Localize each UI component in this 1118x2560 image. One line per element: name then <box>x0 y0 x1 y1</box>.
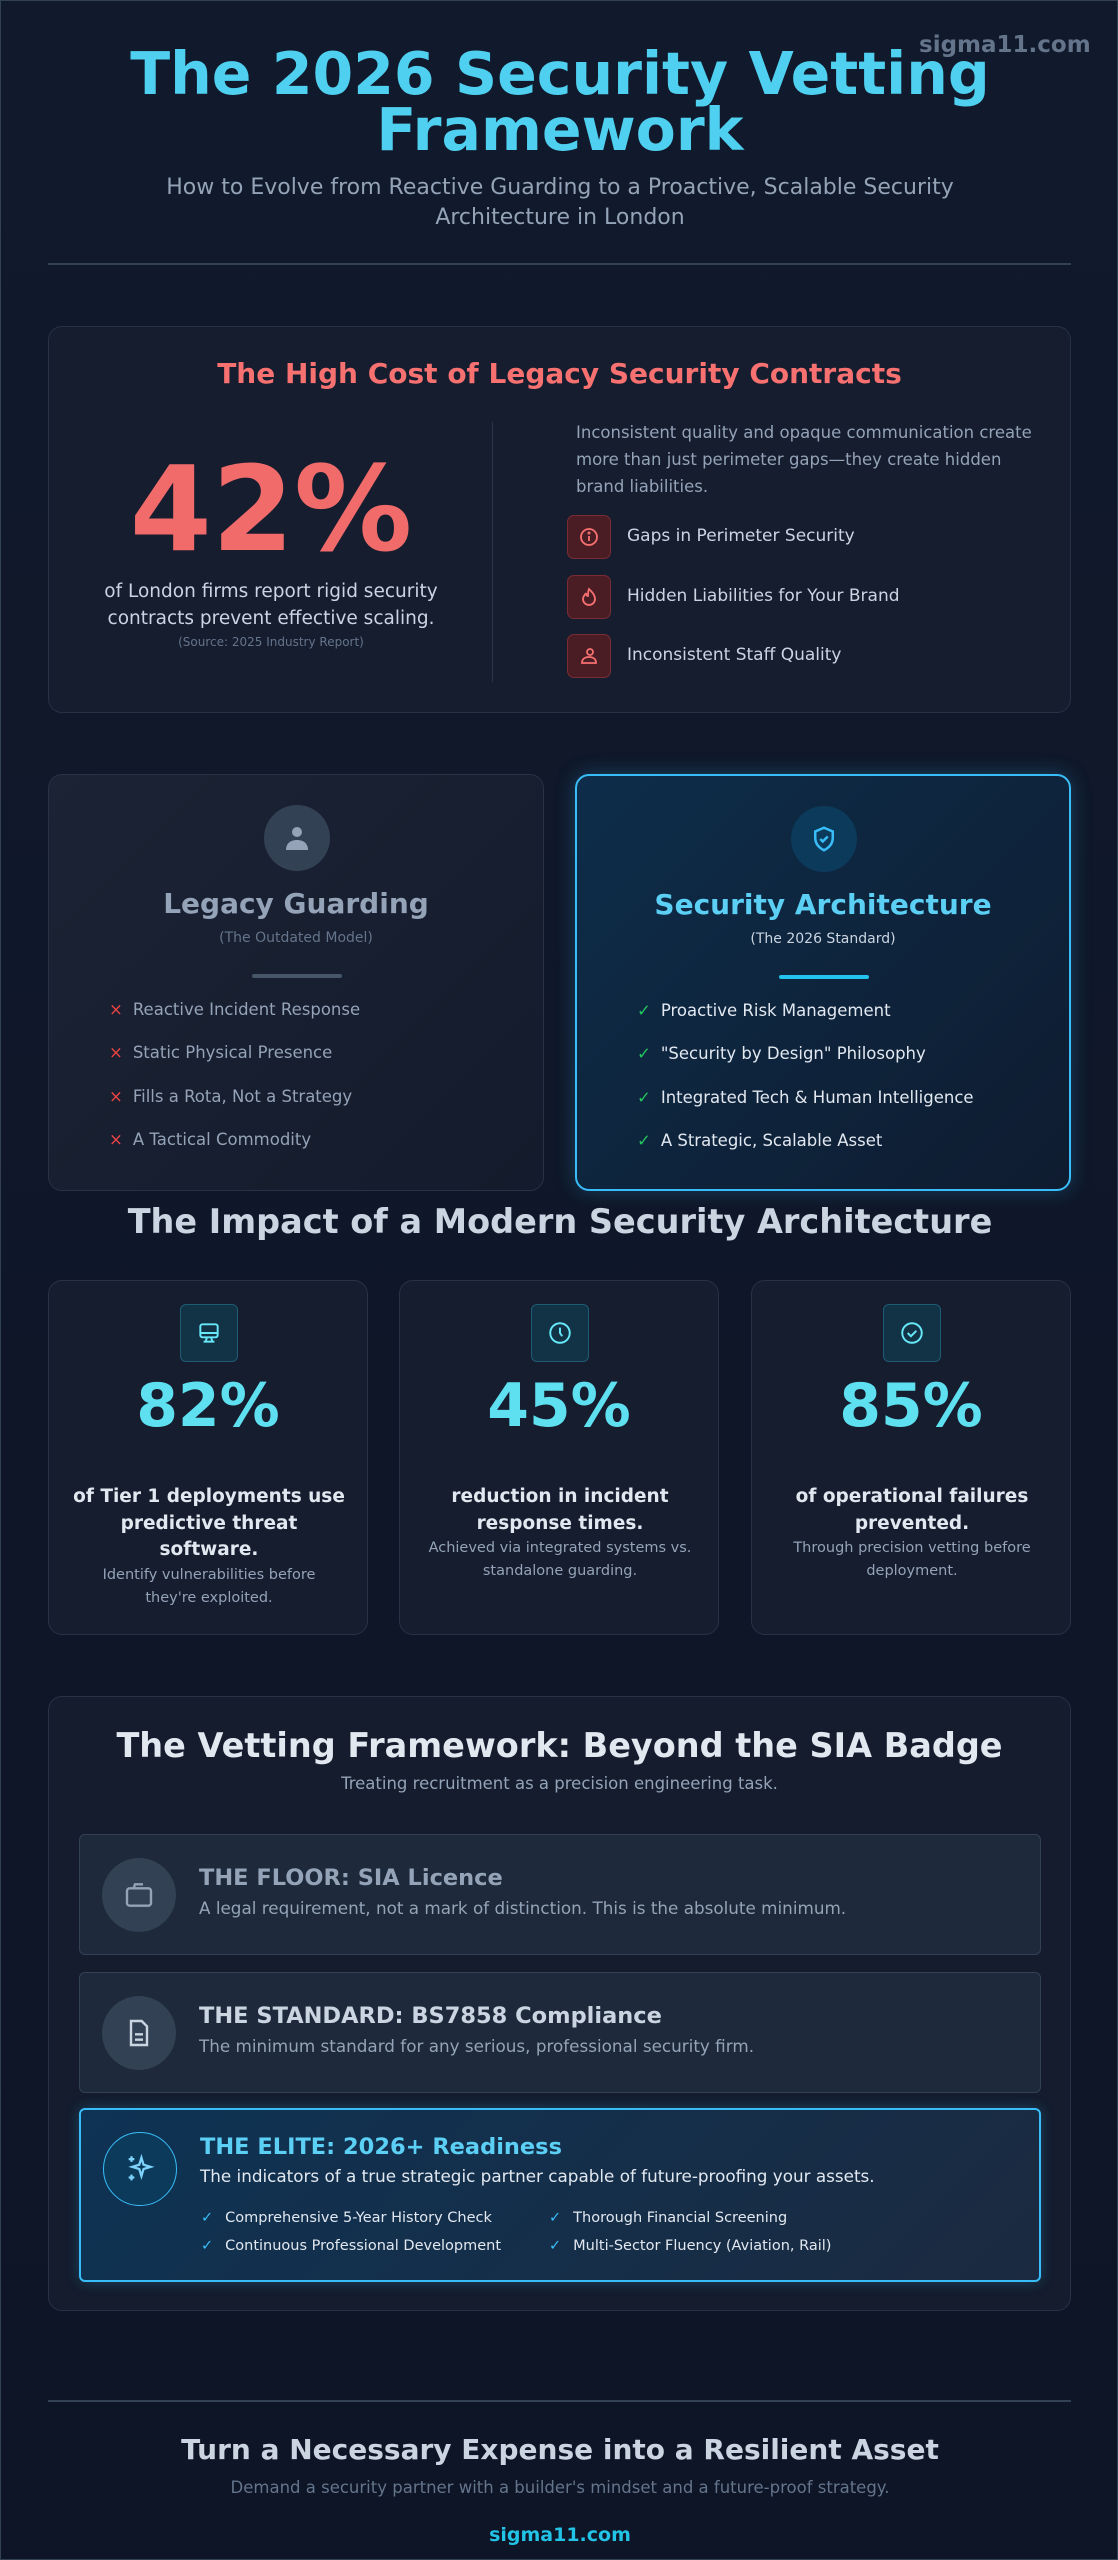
panel heading: The High Cost of Legacy Security Contracts <box>217 357 902 390</box>
icon: clock <box>531 1304 589 1362</box>
stat card: 82%: of Tier 1 deployments use <box>73 1486 345 1507</box>
subtitle: How to Evolve from Reactive Guarding to a Proactive, Scalable Security <box>166 175 954 200</box>
tier: elite <box>79 2108 1041 2282</box>
liabilities text: more than just perimeter gaps—they create hidden <box>576 450 1001 469</box>
icon: flame <box>567 575 611 619</box>
stat card: 45%: standalone guarding. <box>483 1563 637 1579</box>
card title: Legacy Guarding <box>163 887 429 920</box>
list: legacy traits <box>109 1000 360 1149</box>
checklist <box>201 2210 831 2254</box>
stat card: 85%: prevented. <box>855 1512 969 1534</box>
icon: person <box>264 805 330 871</box>
tier: standard: The minimum standard for any serious, professional security firm. <box>199 2036 754 2056</box>
panel: security architecture <box>575 774 1071 1191</box>
panel: high cost of legacy contracts <box>48 326 1071 713</box>
stat card: 85%: of operational failures <box>796 1486 1028 1507</box>
panel: security architecture: (The 2026 Standard) <box>750 931 896 947</box>
icon list: risks: Gaps in Perimeter Security <box>627 526 855 546</box>
brand watermark: sigma11.com <box>919 32 1091 58</box>
stat card: 82%: they're exploited. <box>145 1590 273 1606</box>
tier: standard: THE STANDARD: BS7858 Compliance <box>199 2003 662 2029</box>
icon: shield <box>791 806 857 872</box>
source note: (Source: 2025 Industry Report) <box>178 635 364 649</box>
stat card: 85% <box>751 1280 1071 1635</box>
icon: monitor <box>180 1304 238 1362</box>
list: architecture traits: ✓ "Security by Design" Philosophy <box>637 1044 926 1063</box>
checklist: ✓ Comprehensive 5-Year History Check <box>201 2210 492 2226</box>
list: architecture traits: ✓ A Strategic, Scalable Asset <box>637 1131 882 1150</box>
stat card: 82%: software. <box>160 1539 258 1560</box>
stat caption: contracts prevent effective scaling. <box>108 608 434 629</box>
icon list: risks: Inconsistent Staff Quality <box>627 645 841 665</box>
list: legacy traits: × Static Physical Presence <box>109 1043 332 1062</box>
checklist: ✓ Multi-Sector Fluency (Aviation, Rail) <box>549 2238 831 2254</box>
stat card: 45% <box>399 1280 719 1635</box>
panel: vetting framework: Treating recruitment as a precision engineering task. <box>341 1774 778 1793</box>
liabilities text: brand liabilities. <box>576 477 708 496</box>
stat card: 45%: Achieved via integrated systems vs. <box>429 1540 691 1556</box>
title: The 2026 Security Vetting <box>130 40 990 108</box>
icon list: risks: Hidden Liabilities for Your Brand <box>627 586 900 606</box>
subtitle: Architecture in London <box>435 205 685 230</box>
stat card: 45%: response times. <box>477 1512 643 1534</box>
list: architecture traits <box>637 1001 974 1150</box>
tier: floor: THE FLOOR: SIA Licence <box>199 1865 503 1891</box>
tier: elite: THE ELITE: 2026+ Readiness <box>200 2134 562 2160</box>
stat card: 85%: Through precision vetting before <box>793 1540 1031 1556</box>
icon: document <box>102 1996 176 2070</box>
CTA subtext: Demand a security partner with a builder's mindset and a future-proof strategy. <box>231 2478 889 2497</box>
stat card: 45%: 45% <box>487 1371 631 1441</box>
tier: standard <box>79 1972 1041 2093</box>
stat card: 85%: deployment. <box>866 1563 958 1579</box>
footer link: sigma11.com <box>489 2524 631 2546</box>
panel: vetting framework <box>48 1696 1071 2311</box>
icon list: risks <box>567 515 900 678</box>
checklist: ✓ Thorough Financial Screening <box>549 2210 787 2226</box>
stat card: 45%: reduction in incident <box>451 1486 669 1507</box>
panel heading: The Vetting Framework: Beyond the SIA Badge <box>116 1726 1003 1765</box>
list: legacy traits: × Reactive Incident Response <box>109 1000 360 1019</box>
checklist: ✓ Continuous Professional Development <box>201 2238 501 2254</box>
icon: info <box>567 515 611 559</box>
tier: elite: The indicators of a true strategic partner capable of future-proofing your assets. <box>200 2166 875 2186</box>
liabilities text: Inconsistent quality and opaque communication create <box>576 423 1032 442</box>
subtitle <box>166 175 954 230</box>
liabilities text <box>576 423 1032 496</box>
tier: floor: A legal requirement, not a mark of distinction. This is the absolute minimum. <box>199 1898 846 1918</box>
list: architecture traits: ✓ Proactive Risk Management <box>637 1001 891 1020</box>
title: Framework <box>376 96 744 164</box>
stat card: 82%: Identify vulnerabilities before <box>103 1566 315 1582</box>
stat card: 85%: 85% <box>839 1371 983 1441</box>
tier: floor <box>79 1834 1041 1955</box>
stat caption <box>104 581 438 629</box>
big stat 42%: 42% <box>130 440 412 578</box>
list: architecture traits: ✓ Integrated Tech & Human Intelligence <box>637 1088 974 1107</box>
stat card: 82%: 82% <box>136 1371 280 1441</box>
card title: Security Architecture <box>654 888 992 921</box>
CTA heading: Turn a Necessary Expense into a Resilient Asset <box>181 2433 939 2466</box>
panel: legacy guarding: (The Outdated Model) <box>219 930 373 946</box>
list: legacy traits: × A Tactical Commodity <box>109 1130 311 1149</box>
icon: briefcase <box>102 1858 176 1932</box>
icon: sparkles <box>103 2132 177 2206</box>
title <box>130 40 990 164</box>
stat card: 82% <box>48 1280 368 1635</box>
icon: staff <box>567 634 611 678</box>
section heading: impact: The Impact of a Modern Security Architecture <box>128 1202 992 1241</box>
stat caption: of London firms report rigid security <box>104 581 438 602</box>
list: legacy traits: × Fills a Rota, Not a Strategy <box>109 1087 352 1106</box>
icon: check circle <box>883 1304 941 1362</box>
panel: legacy guarding <box>48 774 544 1191</box>
stat card: 82%: predictive threat <box>121 1512 297 1534</box>
